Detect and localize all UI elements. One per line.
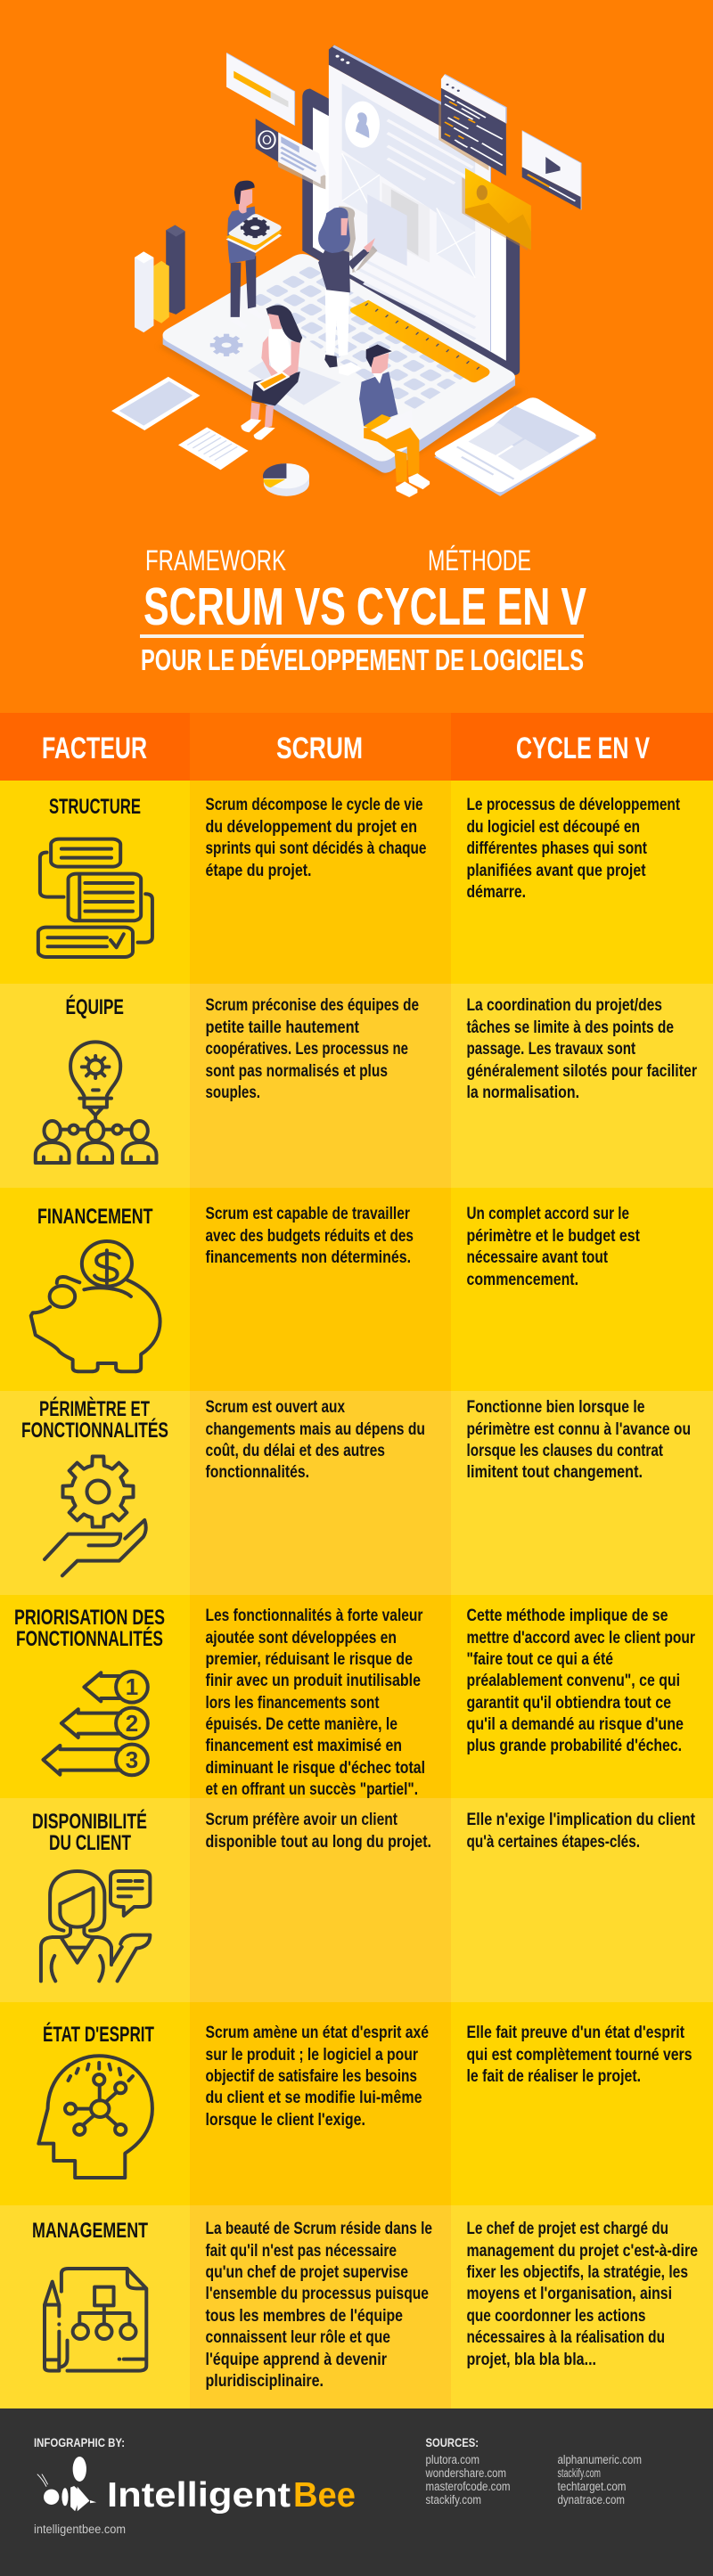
text: scrum état d'esprit: Scrum amène un état d'esprit axé bbox=[205, 2023, 429, 2042]
row: financement: périmètre et le budget est bbox=[467, 1226, 640, 1246]
row: état d'esprit: objectif de satisfaire les besoins bbox=[205, 2066, 417, 2086]
row: disponibilité: qu'à certaines étapes-clés. bbox=[467, 1832, 640, 1852]
row: financement bbox=[0, 1188, 713, 1391]
row: équipe: sont pas normalisés et plus bbox=[205, 1061, 388, 1081]
ruler bbox=[350, 300, 489, 382]
row: priorisation: lors les financements sont bbox=[205, 1693, 380, 1713]
illustration: isometric laptop with team bbox=[111, 45, 596, 497]
row title: DISPONIBILITÉ bbox=[32, 1809, 147, 1834]
keyboard keys bbox=[250, 265, 473, 411]
row: structure: planifiées avant que projet bbox=[467, 861, 646, 880]
row: périmètre: changements mais au dépens du bbox=[205, 1419, 425, 1439]
icon: idea bulb and team bbox=[36, 1042, 157, 1163]
icon: small pale gear bbox=[210, 334, 242, 356]
icon: ranked arrows: 1 bbox=[126, 1673, 138, 1700]
person: standing woman pointing at screen bbox=[318, 207, 377, 376]
icon: ranked arrows: 3 bbox=[126, 1746, 138, 1773]
row: structure: du logiciel est découpé en bbox=[467, 817, 640, 837]
panel: orange header background bbox=[0, 0, 713, 713]
card: email bubble bbox=[256, 119, 326, 189]
icon: client woman with speech bubble bbox=[41, 1871, 150, 1981]
row title: FINANCEMENT bbox=[37, 1205, 153, 1229]
text: scrum disponibilité: Scrum préfère avoir un client bbox=[205, 1810, 397, 1829]
row: priorisation: épuisés. De cette manière, le bbox=[205, 1714, 397, 1734]
icon: head with network bbox=[38, 2056, 152, 2178]
sources list: plutora.com bbox=[426, 2453, 479, 2466]
row: équipe: souples. bbox=[205, 1083, 260, 1102]
row: priorisation: garantit qu'il obtiendra tout ce bbox=[467, 1693, 671, 1713]
row: management: pluridisciplinaire. bbox=[205, 2371, 324, 2391]
row: état d'esprit: du client et se modifie lui-même bbox=[205, 2088, 422, 2107]
icon: piggy bank bbox=[31, 1241, 160, 1371]
text: scrum priorisation: Les fonctionnalités à forte valeur bbox=[205, 1606, 423, 1625]
row: management: moyens et l'organisation, ainsi bbox=[467, 2284, 672, 2303]
person: seated man with laptop bbox=[359, 345, 430, 497]
row title: ÉTAT D'ESPRIT bbox=[43, 2022, 154, 2047]
row: management: que coordonner les actions bbox=[467, 2306, 646, 2326]
label: framework: FRAMEWORK bbox=[145, 544, 286, 577]
icon: document with org chart and pencil bbox=[45, 2269, 146, 2371]
label: méthode: MÉTHODE bbox=[428, 544, 531, 577]
icon: linked documents bbox=[38, 839, 152, 957]
row title: MANAGEMENT bbox=[32, 2219, 148, 2243]
sources list: masterofcode.com bbox=[426, 2480, 510, 2493]
row title bbox=[32, 1809, 147, 1855]
row: management: fait qu'il n'est pas nécessaire bbox=[205, 2241, 397, 2261]
row title: FONCTIONNALITÉS bbox=[21, 1418, 168, 1443]
row: équipe: passage. Les travaux sont bbox=[467, 1039, 635, 1059]
row: management: l'ensemble du processus puisque bbox=[205, 2284, 429, 2303]
row title: PÉRIMÈTRE ET bbox=[39, 1396, 150, 1421]
credit heading: INFOGRAPHIC BY: bbox=[34, 2435, 125, 2449]
text: scrum structure: Scrum décompose le cycle de vie bbox=[205, 795, 423, 814]
row: priorisation: "faire tout ce qui a été bbox=[467, 1649, 613, 1669]
monitor frame bbox=[302, 89, 520, 375]
row: périmètre: lorsque les clauses du contrat bbox=[467, 1441, 663, 1460]
logo: bee mark bbox=[37, 2457, 96, 2511]
row: structure: étape du projet. bbox=[205, 861, 312, 880]
column header: cycle en v: CYCLE EN V bbox=[516, 732, 650, 765]
subtitle rule bbox=[140, 634, 584, 638]
row: équipe bbox=[0, 984, 713, 1188]
row: management bbox=[0, 2205, 713, 2408]
row: état d'esprit: le fait de réaliser le projet. bbox=[467, 2066, 641, 2086]
row: état d'esprit: lorsque le client l'exige. bbox=[205, 2110, 365, 2130]
sources list: stackify.com bbox=[426, 2493, 481, 2506]
website: intelligentbee.com bbox=[34, 2523, 126, 2536]
text: scrum management: La beauté de Scrum réside dans le bbox=[205, 2219, 432, 2238]
row title: PRIORISATION DES bbox=[14, 1606, 165, 1630]
row: état d'esprit bbox=[0, 2002, 713, 2205]
card: video player bbox=[522, 131, 581, 209]
row: priorisation: Cette méthode implique de se bbox=[467, 1606, 668, 1625]
chart: pie bbox=[263, 463, 309, 496]
row title: FONCTIONNALITÉS bbox=[16, 1626, 163, 1651]
person: seated woman with phone bbox=[241, 305, 302, 440]
device: paper note bbox=[178, 428, 249, 470]
row: priorisation: financement est maximisé en bbox=[205, 1736, 402, 1755]
screen sheet with wireframe bbox=[329, 45, 490, 351]
icon: ranked arrows bbox=[43, 1672, 148, 1775]
row: structure: différentes phases qui sont bbox=[467, 838, 647, 858]
icon: gear in hand bbox=[45, 1456, 146, 1575]
row: financement: Un complet accord sur le bbox=[467, 1204, 629, 1223]
row: financement: avec des budgets réduits et des bbox=[205, 1226, 414, 1246]
row: équipe: petite taille hautement bbox=[205, 1018, 359, 1037]
row: priorisation: et en offrant un succès "partiel". bbox=[205, 1779, 418, 1799]
row: structure: sprints qui sont décidés à chaque bbox=[205, 838, 427, 858]
card: code window bbox=[438, 74, 506, 176]
laptop base bbox=[163, 254, 515, 473]
sources heading: SOURCES: bbox=[426, 2435, 479, 2449]
row: structure: démarre. bbox=[467, 882, 526, 902]
column header: facteur: FACTEUR bbox=[42, 732, 147, 765]
row: état d'esprit: sur le produit ; le logiciel a pour bbox=[205, 2045, 418, 2065]
row: disponibilité bbox=[0, 1798, 713, 2002]
sources list bbox=[425, 2453, 642, 2506]
row: management: connaissent leur rôle et que bbox=[205, 2327, 390, 2347]
row: structure: du développement du projet en bbox=[205, 817, 417, 837]
row: priorisation bbox=[0, 1595, 713, 1799]
text: scrum financement: Scrum est capable de travailler bbox=[205, 1204, 410, 1223]
sources list: stackify.com bbox=[558, 2466, 601, 2480]
row: priorisation: finir avec un produit inutilisable bbox=[205, 1671, 421, 1690]
sources list: wondershare.com bbox=[425, 2466, 506, 2480]
row: management: nécessaires à la réalisation du bbox=[467, 2327, 665, 2347]
row: priorisation: diminuant le risque d'échec total bbox=[205, 1758, 425, 1778]
device: newspaper bbox=[434, 397, 596, 496]
icon: ranked arrows: 2 bbox=[126, 1710, 138, 1737]
row: périmètre: limitent tout changement. bbox=[467, 1462, 643, 1482]
card: image bbox=[462, 168, 531, 250]
panel: footer bbox=[0, 2408, 713, 2576]
title block bbox=[140, 544, 586, 676]
row title: ÉQUIPE bbox=[66, 994, 124, 1019]
row: management: projet, bla bla bla... bbox=[467, 2350, 596, 2369]
row: périmètre: Fonctionne bien lorsque le bbox=[467, 1397, 645, 1417]
row: financement: commencement. bbox=[467, 1270, 578, 1289]
row: management: l'équipe apprend à devenir bbox=[205, 2350, 387, 2369]
laptop shadow bbox=[160, 341, 523, 476]
row: périmètre: fonctionnalités. bbox=[205, 1462, 309, 1482]
device: tablet bbox=[111, 377, 200, 430]
sources list: alphanumeric.com bbox=[558, 2453, 642, 2466]
logo: wordmark: Intelligent bbox=[107, 2476, 291, 2515]
row: financement: nécessaire avant tout bbox=[467, 1247, 608, 1267]
row: équipe: la normalisation. bbox=[467, 1083, 579, 1102]
row: management: tous les membres de l'équipe bbox=[205, 2306, 403, 2326]
sources list: dynatrace.com bbox=[558, 2493, 625, 2506]
icon: bar chart blocks bbox=[135, 225, 185, 332]
row: management: qu'un chef de projet supervise bbox=[205, 2262, 408, 2282]
sources list: techtarget.com bbox=[558, 2480, 626, 2493]
table header bbox=[0, 713, 713, 781]
card: progress bar bbox=[226, 53, 295, 126]
row: structure bbox=[0, 781, 713, 984]
person: standing man with gear box bbox=[226, 181, 282, 329]
row: disponibilité: disponible tout au long du projet. bbox=[205, 1832, 431, 1852]
row: équipe: coopératives. Les processus ne bbox=[205, 1039, 408, 1059]
column header: scrum: SCRUM bbox=[276, 732, 363, 765]
row title bbox=[14, 1606, 165, 1651]
row: périmètre: coût, du délai et des autres bbox=[205, 1441, 385, 1460]
row title bbox=[21, 1396, 168, 1443]
row: priorisation: premier, réduisant le risque de bbox=[205, 1649, 413, 1669]
text: scrum périmètre: Scrum est ouvert aux bbox=[205, 1397, 345, 1417]
row: priorisation: ajoutée sont développées en bbox=[205, 1628, 397, 1648]
row: financement: financements non déterminés. bbox=[205, 1247, 411, 1267]
trackpad bbox=[248, 356, 341, 405]
row: équipe: La coordination du projet/des bbox=[467, 995, 662, 1015]
row: périmètre bbox=[0, 1391, 713, 1595]
panel: footer: Bee bbox=[293, 2476, 356, 2515]
row title: STRUCTURE bbox=[49, 795, 141, 819]
row title: DU CLIENT bbox=[49, 1831, 131, 1855]
text: scrum équipe: Scrum préconise des équipes de bbox=[205, 995, 419, 1015]
